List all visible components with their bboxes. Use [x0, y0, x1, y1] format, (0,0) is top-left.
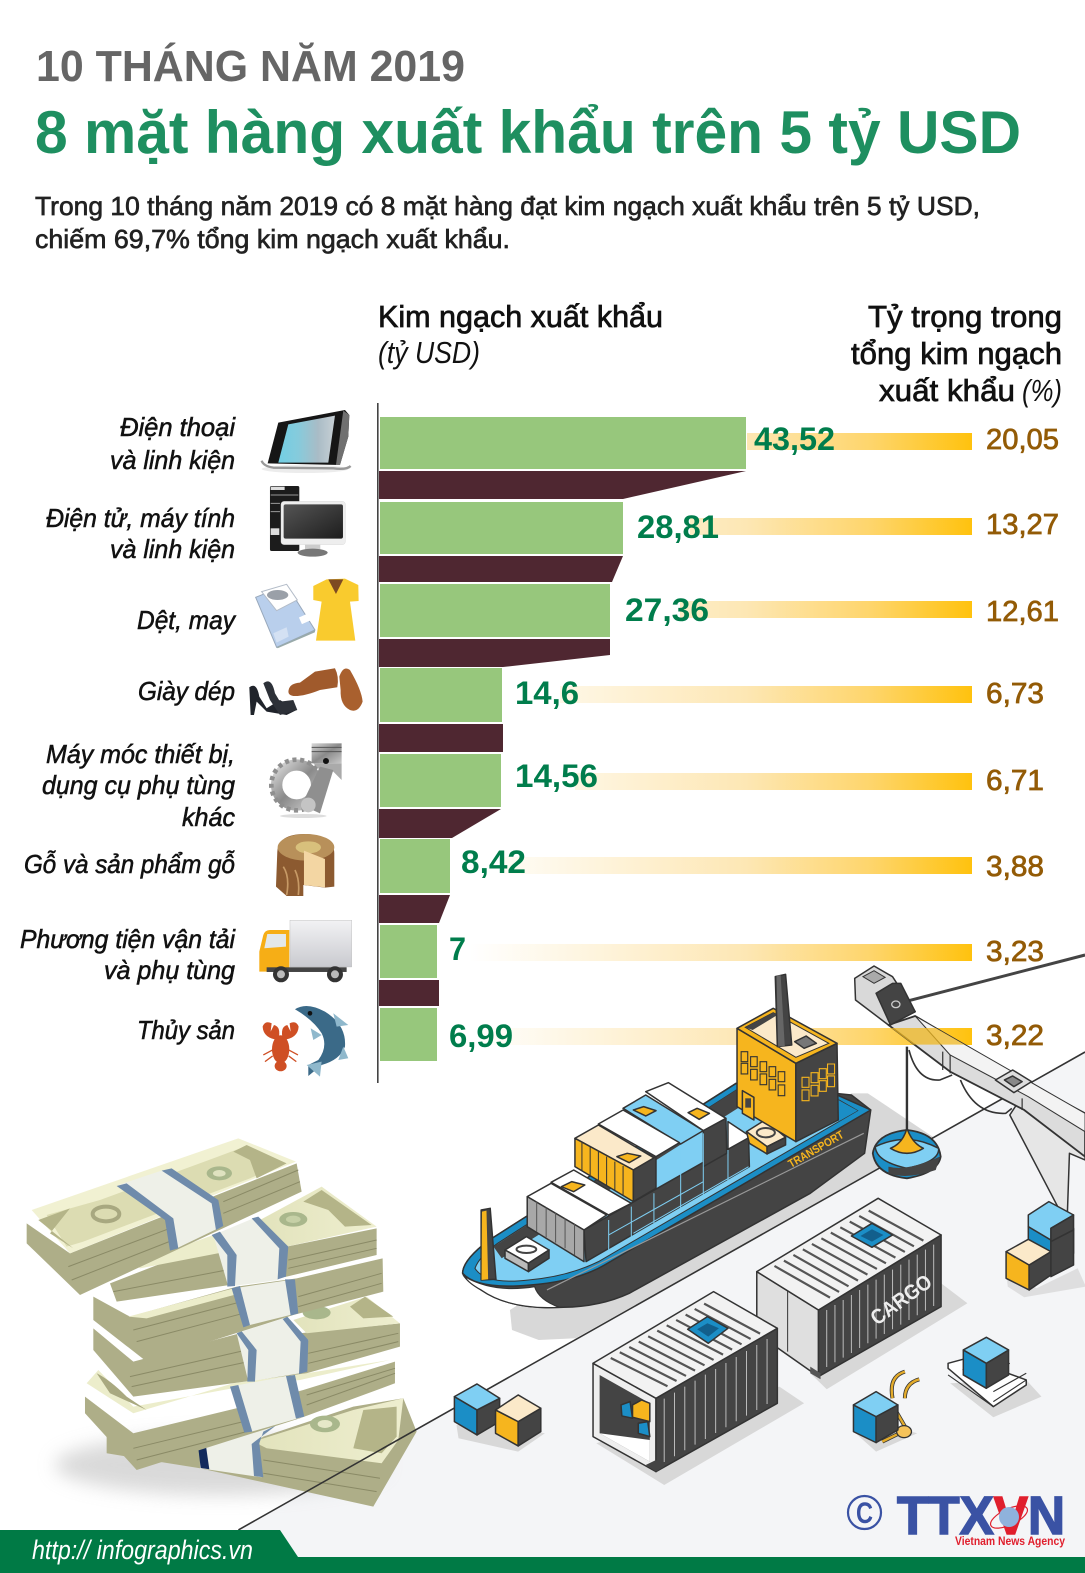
category labels: dụng cụ phụ tùng: [42, 770, 236, 800]
bundle 5: [85, 1360, 395, 1470]
shadows and shore line: [238, 1052, 1085, 1530]
export values: 6,99: [449, 1018, 513, 1054]
column header: share: (%): [1022, 373, 1062, 408]
money stack: [27, 1138, 417, 1507]
heading: period: 10 THÁNG NĂM 2019: [36, 41, 465, 91]
share values: 3,88: [986, 851, 1044, 883]
ground: [240, 1052, 1085, 1573]
export values: 27,36: [625, 592, 709, 628]
category labels: Máy móc thiết bị,: [46, 739, 235, 769]
category labels: và linh kiện: [110, 534, 235, 564]
bow mast: [481, 1208, 496, 1280]
cargo container shadow: [810, 1283, 967, 1389]
footer bar: [0, 1530, 1085, 1573]
share values: 6,73: [986, 678, 1044, 710]
title: 8 mặt hàng xuất khẩu trên 5 tỷ USD: [35, 99, 1021, 166]
export values: 43,52: [754, 421, 835, 457]
share gradient bars: [440, 433, 972, 1045]
cargo container: [757, 1198, 941, 1379]
share values: 3,23: [986, 936, 1044, 968]
category labels: và linh kiện: [110, 445, 235, 475]
intro text: Trong 10 tháng năm 2019 có 8 mặt hàng đạt kim ngạch xuất khẩu trên 5 tỷ USD,: [35, 191, 980, 221]
bar chart: export value funnel: [377, 403, 746, 1083]
boxes hanging under crane: [1006, 1202, 1085, 1297]
share values: 13,27: [986, 509, 1059, 541]
stern winch: [746, 1120, 786, 1154]
open container: [593, 1292, 777, 1472]
icon: seafood: [263, 1006, 348, 1077]
column header: share: Tỷ trọng trong: [868, 299, 1062, 334]
footer url: http:// infographics.vn: [32, 1535, 253, 1565]
export values: 8,42: [461, 844, 526, 880]
crane arm: [855, 966, 1085, 1213]
icon: shoes: [249, 668, 363, 715]
box on hand trolley: [853, 1372, 919, 1452]
share values: 6,71: [986, 765, 1044, 797]
share values: [986, 424, 1059, 1052]
export values: 7: [449, 931, 466, 967]
ship label: TRANSPORT: [786, 1129, 846, 1171]
icon: machinery: [271, 743, 342, 818]
column header: export value: (tỷ USD): [378, 335, 480, 370]
crane cable: [905, 955, 1085, 1002]
share values: 20,05: [986, 424, 1059, 456]
copyright mark: C: [856, 1497, 873, 1530]
bundle 2: [110, 1187, 377, 1302]
icon: phone: [262, 410, 351, 473]
share values: 12,61: [986, 596, 1059, 628]
category labels: [20, 412, 237, 1045]
category labels: Điện thoại: [120, 412, 236, 442]
crane hook and magnet: [873, 1047, 1012, 1178]
bow winch: [505, 1237, 549, 1272]
bundle 4: [93, 1297, 400, 1397]
category labels: Gỗ và sản phẩm gỗ: [24, 849, 235, 879]
export values: 28,81: [637, 509, 719, 545]
category labels: Thủy sản: [137, 1015, 235, 1045]
container ship: [463, 1083, 871, 1308]
category labels: và phụ tùng: [104, 955, 236, 985]
column header: share: xuất khẩu: [879, 373, 1015, 408]
intro text: [35, 191, 980, 254]
category labels: Điện tử, máy tính: [46, 503, 235, 533]
intro text: chiếm 69,7% tổng kim ngạch xuất khẩu.: [35, 224, 510, 254]
icon: wood: [276, 834, 334, 896]
category labels: Dệt, may: [137, 605, 237, 635]
money shadow: [55, 1435, 385, 1495]
icons: [249, 410, 363, 715]
column header: share: tổng kim ngạch: [851, 336, 1062, 371]
column header: export value: [378, 299, 663, 370]
export values: [449, 421, 835, 1054]
container label: CARGO: [866, 1270, 937, 1330]
share values: 3,22: [986, 1020, 1044, 1052]
icon: computer: [270, 486, 345, 557]
containers on deck: [527, 1083, 751, 1262]
open container shadow: [596, 1387, 804, 1485]
icon: clothes: [256, 579, 359, 648]
export values: 14,6: [515, 675, 579, 711]
bundle 1: [27, 1138, 302, 1295]
column header: export value: Kim ngạch xuất khẩu: [378, 299, 663, 334]
copyright mark: [848, 1496, 881, 1530]
column header: share: [851, 299, 1062, 408]
export values: 14,56: [515, 758, 598, 794]
icon: truck: [259, 920, 352, 982]
category labels: Giày dép: [138, 676, 235, 706]
boxes near shore: [454, 1384, 545, 1452]
box on pallet: [948, 1337, 1041, 1417]
bundle 6: [107, 1398, 417, 1507]
ship and port scene: [454, 955, 1085, 1485]
ship bridge: [737, 974, 838, 1142]
logo: TTXVN: TTXVN: [897, 1486, 1065, 1546]
bundle 3: [93, 1258, 383, 1362]
category labels: khác: [182, 802, 235, 832]
logo: TTXVN: Vietnam News Agency: [955, 1536, 1066, 1548]
category labels: Phương tiện vận tải: [20, 924, 236, 954]
